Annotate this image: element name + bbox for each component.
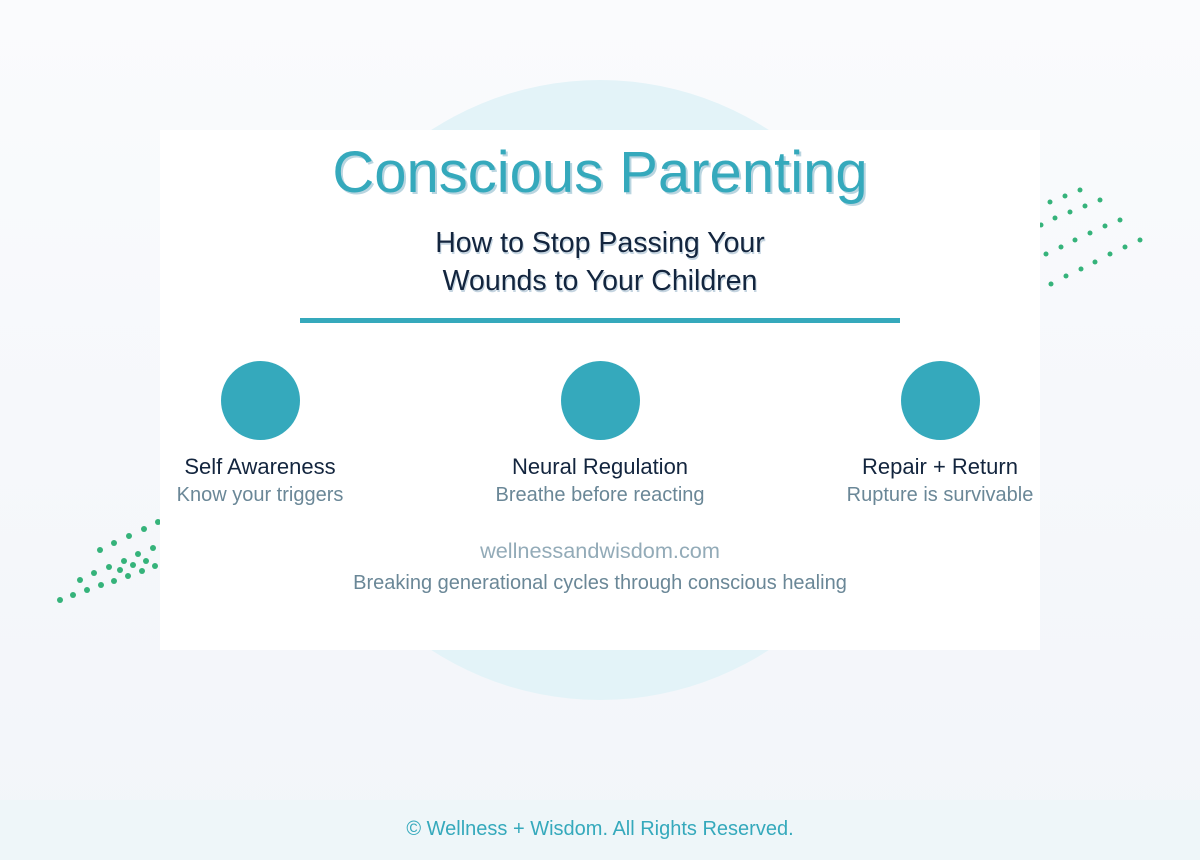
step 3: Rupture is survivable: [847, 484, 1033, 506]
subtitle: [435, 227, 766, 297]
title: Conscious Parenting: [332, 140, 868, 205]
step 1: [177, 361, 343, 506]
background circle: [290, 80, 910, 700]
subtitle: Wounds to Your Children: [443, 265, 757, 297]
subtitle: How to Stop Passing Your: [435, 227, 765, 259]
step 3: [847, 361, 1033, 506]
tagline: Breaking generational cycles through conscious healing: [353, 572, 847, 594]
step 1: Know your triggers: [177, 484, 343, 506]
icon circle: [221, 361, 300, 440]
step 2: Breathe before reacting: [495, 484, 705, 506]
step 1: Self Awareness: [184, 454, 336, 479]
footer: [0, 800, 1200, 860]
step 3: Repair + Return: [862, 454, 1018, 479]
icon circle: [901, 361, 980, 440]
step 2: Neural Regulation: [512, 454, 688, 479]
step 2: [495, 361, 705, 506]
divider: [300, 318, 900, 323]
main card: [160, 130, 1040, 650]
footer: © Wellness + Wisdom. All Rights Reserved.: [406, 818, 794, 840]
icon circle: [561, 361, 640, 440]
website: wellnessandwisdom.com: [480, 538, 720, 563]
